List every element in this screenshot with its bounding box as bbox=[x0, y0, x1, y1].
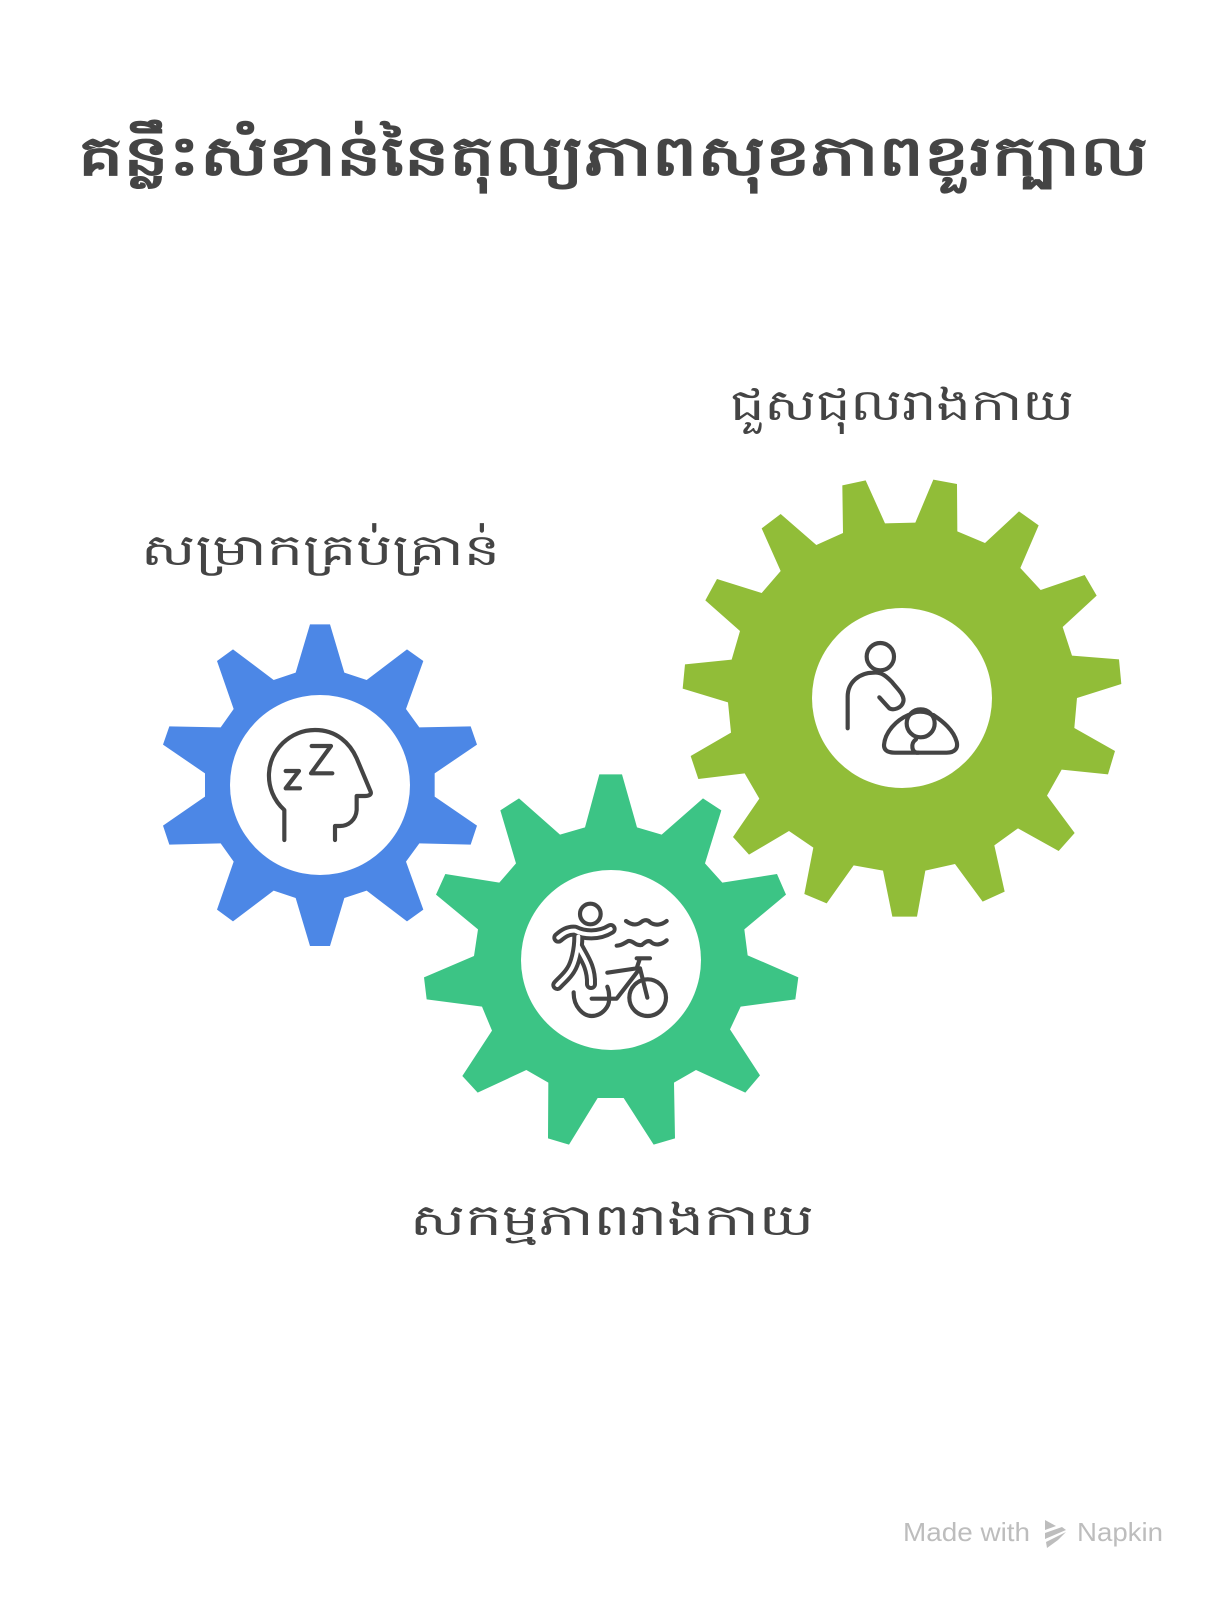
watermark: Made with Napkin: Made with bbox=[903, 1517, 1030, 1547]
gear: teal activity bbox=[424, 774, 798, 1145]
title: គន្លឹះសំខាន់នៃតុល្យភាពសុខភាពខួរក្បាល bbox=[78, 119, 1148, 194]
icon: sleeping head bbox=[269, 730, 371, 840]
watermark: Made with Napkin: Napkin bbox=[1077, 1517, 1163, 1547]
icon: Napkin logo bbox=[1045, 1520, 1066, 1548]
watermark: Made with Napkin bbox=[903, 1517, 1163, 1548]
icon: runner, waves and bicycle bbox=[557, 904, 667, 1016]
label: body repair: ជួសជុលរាងកាយ bbox=[730, 381, 1074, 434]
label: physical activity: សកម្មភាពរាងកាយ bbox=[410, 1196, 814, 1246]
gear: blue sleep bbox=[163, 624, 477, 946]
gear: olive body repair bbox=[683, 480, 1121, 917]
label: sufficient rest: សម្រាកគ្រប់គ្រាន់ bbox=[141, 523, 500, 576]
icon: caregiver and resting person bbox=[848, 643, 957, 753]
